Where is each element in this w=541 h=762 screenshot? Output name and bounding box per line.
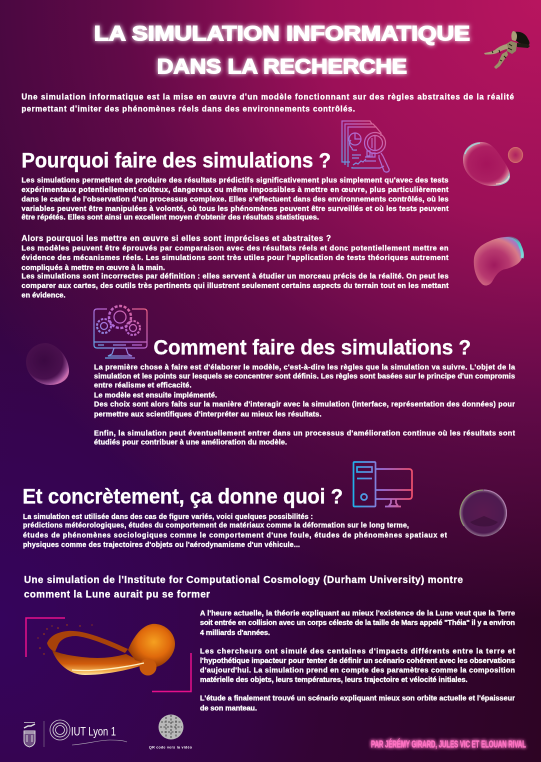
text block: moon: L'étude a finalement trouvé un scénario expliquant mieux son orbite actuelle et l'épaisseur <box>200 694 515 703</box>
text block: comment: simulation et les points sur lesquels se concentrer sont définis. Les règles sont basées sur le principe d'un compromis <box>94 372 515 381</box>
text block: moon: matérielle des objets, leurs températures, leurs trajectoire et vélocité initiales. <box>200 675 468 684</box>
subheading: Alors pourquoi les mettre en œuvre si elles sont imprécises et abstraites ? <box>22 234 331 243</box>
divider <box>43 721 45 747</box>
text block: pourquoi: Les simulations permettent de produire des résultats prédictifs significativement plus simplement qu'avec des tests <box>22 176 448 185</box>
text block: comment: étudiés pour contribuer à une amélioration du modèle. <box>94 438 287 447</box>
text block: concretement: physiques comme des trajectoires d'objets ou l'aérodynamisme d'un véhicule... <box>23 542 300 549</box>
icon: document analysis <box>342 121 389 172</box>
QR code: QR code vers la vidéo <box>149 746 193 750</box>
title: LA SIMULATION INFORMATIQUE <box>94 22 470 46</box>
text block: comment: Des choix sont alors faits sur la manière d'interagir avec la simulation (interface, représentation des données) pour <box>94 400 515 409</box>
text block: moon: soit entrée en collision avec un corps céleste de la taille de Mars appelé "Théia" il y a environ <box>200 618 515 627</box>
text block: moon: de son manteau. <box>200 704 257 713</box>
heading: comment: Comment faire des simulations ? <box>154 336 471 360</box>
bubble top right large <box>463 142 510 186</box>
moon simulation heading <box>24 575 464 600</box>
text block: moon: 4 milliards d'années. <box>200 628 270 637</box>
logo: IUT Lyon 1: IUT Lyon 1 <box>71 726 116 738</box>
icon: desktop computer <box>354 462 412 506</box>
icon: gears on monitor <box>94 306 147 358</box>
logo: university crest <box>24 722 35 747</box>
text block: concretement: prédictions météorologiques, études du comportement de matériaux comme la déformation sur le long terme, <box>23 523 409 530</box>
text block: pourquoi: être répétés. Elles sont ainsi un excellent moyen d'obtenir des résultats statistiques. <box>22 213 319 222</box>
intro text: Une simulation informatique est la mise en œuvre d'un modèle fonctionnant sur des règles abstraites de la réalité <box>22 93 515 102</box>
text block: alors pourquoi: évidence des mécanismes réels. Les simulations sont très utiles pour l'application de tests théoriques autrement <box>22 253 449 262</box>
text block: alors pourquoi: comparer aux cartes, des outils très pertinents qui illustrent seulement certains aspects du terrain tout en les mettant <box>22 281 449 290</box>
text block: alors pourquoi <box>22 244 449 300</box>
text block: alors pourquoi: Les simulations sont incorrectes par définition : elles servent à étudier un morceau précis de la réalité. On peut les <box>22 272 449 281</box>
text block: moon: A l'heure actuelle, la théorie expliquant au mieux l'existence de la Lune veut que la Terre <box>200 609 515 618</box>
heading: pourquoi: Pourquoi faire des simulations ? <box>22 148 331 172</box>
text block: comment: permettre aux scientifiques d'interpréter au mieux les résultats. <box>94 410 322 419</box>
image: moon impact simulation <box>37 624 175 676</box>
text block: moon: l'hypothétique impacteur pour tenter de définir un scénario cohérent avec les observations <box>200 656 515 665</box>
moon simulation heading: comment la Lune aurait pu se former <box>24 589 210 600</box>
text block: concretement: La simulation est utilisée dans des cas de figure variés, voici quelques possibilités : <box>23 514 313 521</box>
text block: pourquoi: expérimentaux potentiellement coûteux, dangereux ou même impossibles à mettre en œuvre, plus particulièrement <box>22 185 449 194</box>
text block: pourquoi: dans le cadre de l'observation d'un processus complexe. Elles s'effectuent dans des environnements contrôlés, où les <box>22 195 448 204</box>
text block: moon <box>200 609 516 713</box>
text block: comment <box>94 362 516 447</box>
intro text: permettant d'imiter des phénomènes réels dans des environnements contrôlés. <box>22 104 355 113</box>
text block: concretement: études de phénomènes sociologiques comme le comportement d'une foule, études de phénomènes spatiaux et <box>23 533 448 540</box>
heading: concretement: Et concrètement, ça donne quoi ? <box>22 484 343 508</box>
text block: moon: Les chercheurs ont simulé des centaines d'impacts différents entre la terre et <box>200 647 516 656</box>
text block: comment: La première chose à faire est d'élaborer le modèle, c'est-à-dire les règles que la simulation va suivre. L'objet de la <box>94 362 516 371</box>
bubble right lower <box>460 490 507 536</box>
logo: IUT Lyon 1 <box>50 720 127 745</box>
text block: alors pourquoi: compliqués à mettre en œuvre à la main. <box>22 263 165 272</box>
bubble left <box>26 343 69 385</box>
moon simulation heading: Une simulation de l'Institute for Computational Cosmology (Durham University) montre <box>24 575 464 586</box>
text block: moon: d'aujourd'hui. La simulation prend en compte des paramètres comme la composition <box>200 666 515 675</box>
bubble right middle <box>474 237 522 286</box>
text block: comment: Enfin, la simulation peut éventuellement entrer dans un processus d'amélioration continue où les résultats sont <box>94 429 516 438</box>
title: DANS LA RECHERCHE <box>157 56 407 78</box>
text block: comment: entre réalisme et efficacité. <box>94 381 192 390</box>
QR code <box>149 714 193 750</box>
text block: alors pourquoi: en évidence. <box>22 291 66 300</box>
text block: pourquoi: variables peuvent être manipulées à volonté, où tous les phénomènes peuvent être surveillés et où les tests peuvent <box>22 204 449 213</box>
text block: pourquoi <box>22 176 449 222</box>
image frame brackets <box>26 618 191 692</box>
icon: astronaut <box>484 31 530 69</box>
title <box>94 22 470 78</box>
text block: alors pourquoi: Les modèles peuvent être éprouvés par comparaison avec des résultats réels et donc potentiellement mettre en <box>22 244 449 253</box>
text block: comment: Le modèle est ensuite implémenté. <box>94 390 217 399</box>
text block: concretement <box>23 514 448 549</box>
bubble top right small <box>508 147 523 163</box>
intro text <box>22 93 515 113</box>
